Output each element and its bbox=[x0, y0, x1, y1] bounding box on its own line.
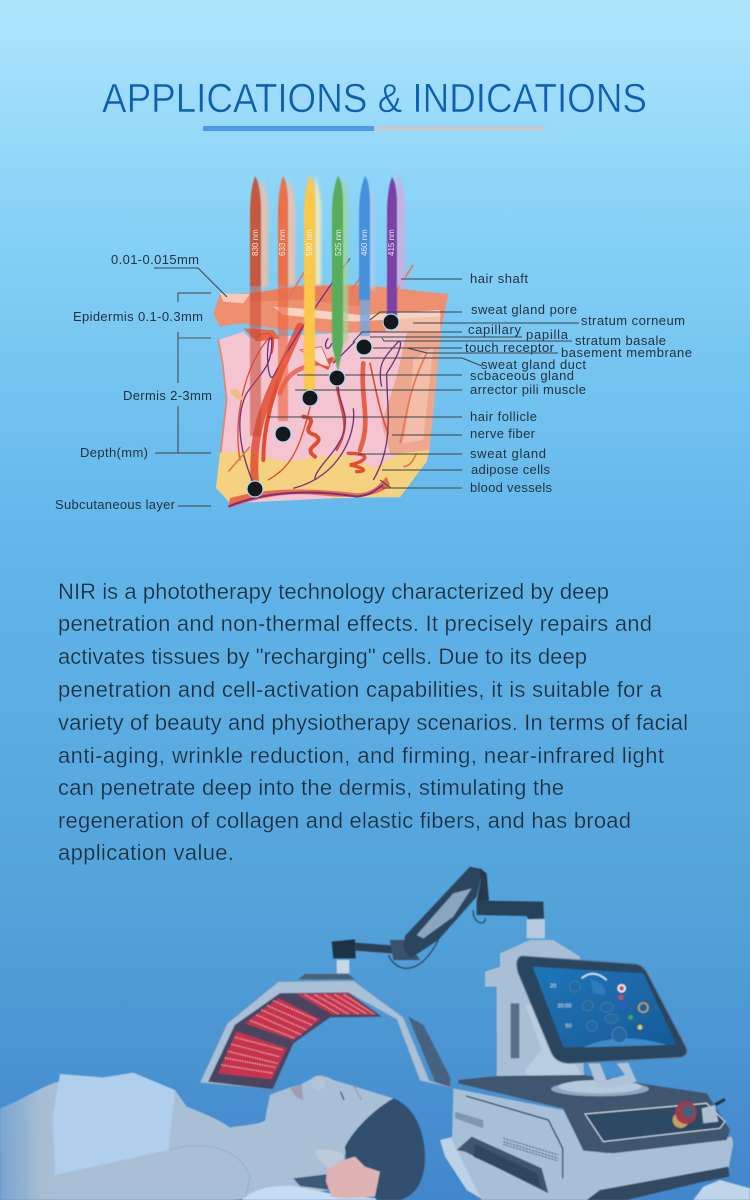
panel top cap bbox=[298, 974, 355, 979]
right labels: touch receptor bbox=[465, 340, 555, 355]
emergency stop button bbox=[673, 1101, 697, 1128]
panel inner bbox=[208, 993, 382, 1089]
left labels: Subcutaneous layer bbox=[55, 497, 176, 512]
cable bbox=[388, 940, 438, 968]
panel frame bbox=[200, 981, 450, 1089]
LED array lower bbox=[218, 1032, 287, 1079]
right labels: basement membrane bbox=[561, 345, 692, 360]
pillow bbox=[242, 1186, 390, 1200]
description paragraph: anti-aging, wrinkle reduction, and firming, near-infrared light bbox=[58, 743, 664, 768]
description paragraph bbox=[58, 579, 688, 865]
right labels: sweat gland duct bbox=[481, 357, 586, 372]
cabinet seam bbox=[466, 1096, 563, 1178]
screen hinge bbox=[588, 1063, 637, 1088]
hair bbox=[345, 1098, 425, 1200]
left labels: Depth(mm) bbox=[80, 445, 148, 460]
LED array top bbox=[297, 993, 377, 1015]
arm cable bbox=[473, 910, 485, 923]
right labels: sweat gland bbox=[470, 446, 546, 461]
lower vent bbox=[457, 1137, 548, 1193]
right labels: stratum basale bbox=[575, 333, 666, 348]
cabinet top bbox=[458, 1075, 730, 1153]
hair under neck bbox=[293, 1174, 330, 1190]
elbow joint bbox=[390, 940, 420, 960]
horizontal arm bbox=[477, 901, 544, 919]
arm post bbox=[477, 868, 489, 902]
right labels: adipose cells bbox=[471, 462, 550, 477]
tower bbox=[485, 940, 584, 1078]
ear bbox=[315, 1149, 345, 1168]
right labels: sweat gland pore bbox=[471, 302, 577, 317]
description paragraph: activates tissues by "recharging" cells. Due to its deep bbox=[58, 644, 587, 669]
description paragraph: variety of beauty and physiotherapy scenarios. In terms of facial bbox=[58, 710, 688, 735]
right labels: papilla bbox=[526, 327, 569, 342]
right labels: nerve fiber bbox=[470, 426, 536, 441]
touch screen: 30:00 bbox=[557, 1004, 571, 1010]
description paragraph: penetration and non-thermal effects. It precisely repairs and bbox=[58, 611, 652, 636]
right leader lines bbox=[268, 279, 579, 488]
LED panel and arm bbox=[200, 867, 545, 1089]
arm segment bbox=[355, 943, 400, 954]
woman lying down bbox=[0, 1073, 425, 1200]
penetration depth markers bbox=[247, 314, 399, 497]
right labels: blood vessels bbox=[470, 480, 552, 495]
left labels: 0.01-0.015mm bbox=[111, 252, 199, 267]
arm shadow bbox=[170, 1146, 250, 1200]
tower bracket bbox=[525, 1003, 580, 1084]
shelf right bbox=[693, 1180, 750, 1200]
left depth brackets bbox=[154, 268, 227, 506]
beam wavelength labels: 633 nm bbox=[278, 229, 287, 256]
right labels bbox=[465, 271, 692, 495]
skin penetration diagram bbox=[55, 172, 692, 512]
barcode bbox=[455, 1112, 483, 1128]
eye bbox=[341, 1092, 344, 1100]
beam wavelength labels: 590 nm bbox=[305, 229, 314, 256]
title: APPLICATIONS & INDICATIONS bbox=[102, 75, 647, 121]
left labels: Dermis 2-3mm bbox=[123, 388, 212, 403]
beam wavelength labels: 460 nm bbox=[360, 229, 369, 256]
flower bbox=[326, 1157, 380, 1198]
description paragraph: application value. bbox=[58, 840, 234, 865]
head joint bbox=[332, 939, 356, 958]
right labels: hair follicle bbox=[470, 409, 537, 424]
beam 590 nm bbox=[304, 175, 321, 392]
description paragraph: regeneration of collagen and elastic fibers, and has broad bbox=[58, 808, 631, 833]
beam 633 nm bbox=[278, 176, 295, 421]
beam wavelength labels: 525 nm bbox=[334, 229, 343, 256]
touch screen bbox=[517, 956, 687, 1063]
right labels: hair shaft bbox=[470, 271, 528, 286]
lower band bbox=[587, 1167, 729, 1200]
panel stem bbox=[337, 960, 349, 973]
beam 525 nm bbox=[332, 176, 348, 372]
eyebrow bbox=[353, 1085, 362, 1100]
lips bbox=[290, 1085, 303, 1100]
towel bbox=[53, 1073, 175, 1175]
key switch bbox=[702, 1099, 725, 1123]
grille bbox=[503, 1138, 558, 1161]
lower vent inner bbox=[473, 1144, 542, 1188]
shelf left bbox=[440, 1137, 483, 1200]
LED array middle bbox=[245, 998, 320, 1040]
chrome column bbox=[527, 919, 545, 938]
control panel bbox=[585, 1103, 725, 1142]
body bbox=[0, 1076, 393, 1200]
description paragraph: NIR is a phototherapy technology characterized by deep bbox=[58, 579, 609, 604]
arm screen highlight bbox=[417, 888, 472, 938]
tower vent bbox=[511, 1003, 519, 1058]
right labels: stratum corneum bbox=[581, 313, 685, 328]
title underline bar bbox=[203, 126, 545, 131]
left labels bbox=[55, 252, 212, 512]
cabinet body bbox=[452, 1088, 733, 1200]
right labels: scbaceous gland bbox=[470, 368, 574, 383]
beam wavelength labels: 830 nm bbox=[251, 229, 260, 256]
right labels: capillary bbox=[468, 322, 522, 337]
skin cross-section illustration bbox=[213, 258, 448, 508]
description paragraph: penetration and cell-activation capabilities, it is suitable for a bbox=[58, 677, 663, 702]
nose highlight bbox=[312, 1077, 325, 1090]
wavelength beams bbox=[250, 172, 405, 436]
beam 415 nm bbox=[387, 172, 405, 318]
left labels: Epidermis 0.1-0.3mm bbox=[73, 309, 203, 324]
panel back wing bbox=[408, 1017, 451, 1087]
beam 460 nm bbox=[359, 176, 375, 336]
beam wavelength labels bbox=[251, 229, 396, 256]
touch screen: 50 bbox=[565, 1024, 572, 1030]
description paragraph: can penetrate deep into the dermis, stimulating the bbox=[58, 775, 564, 800]
beam 830 nm bbox=[250, 176, 268, 436]
machine bbox=[440, 940, 750, 1200]
treatment scene bbox=[0, 867, 750, 1200]
beam wavelength labels: 415 nm bbox=[387, 229, 396, 256]
touch screen: 20 bbox=[550, 984, 556, 990]
right labels: arrector pili muscle bbox=[470, 382, 586, 397]
turntable bbox=[551, 1080, 649, 1096]
arm screen bbox=[403, 867, 483, 959]
